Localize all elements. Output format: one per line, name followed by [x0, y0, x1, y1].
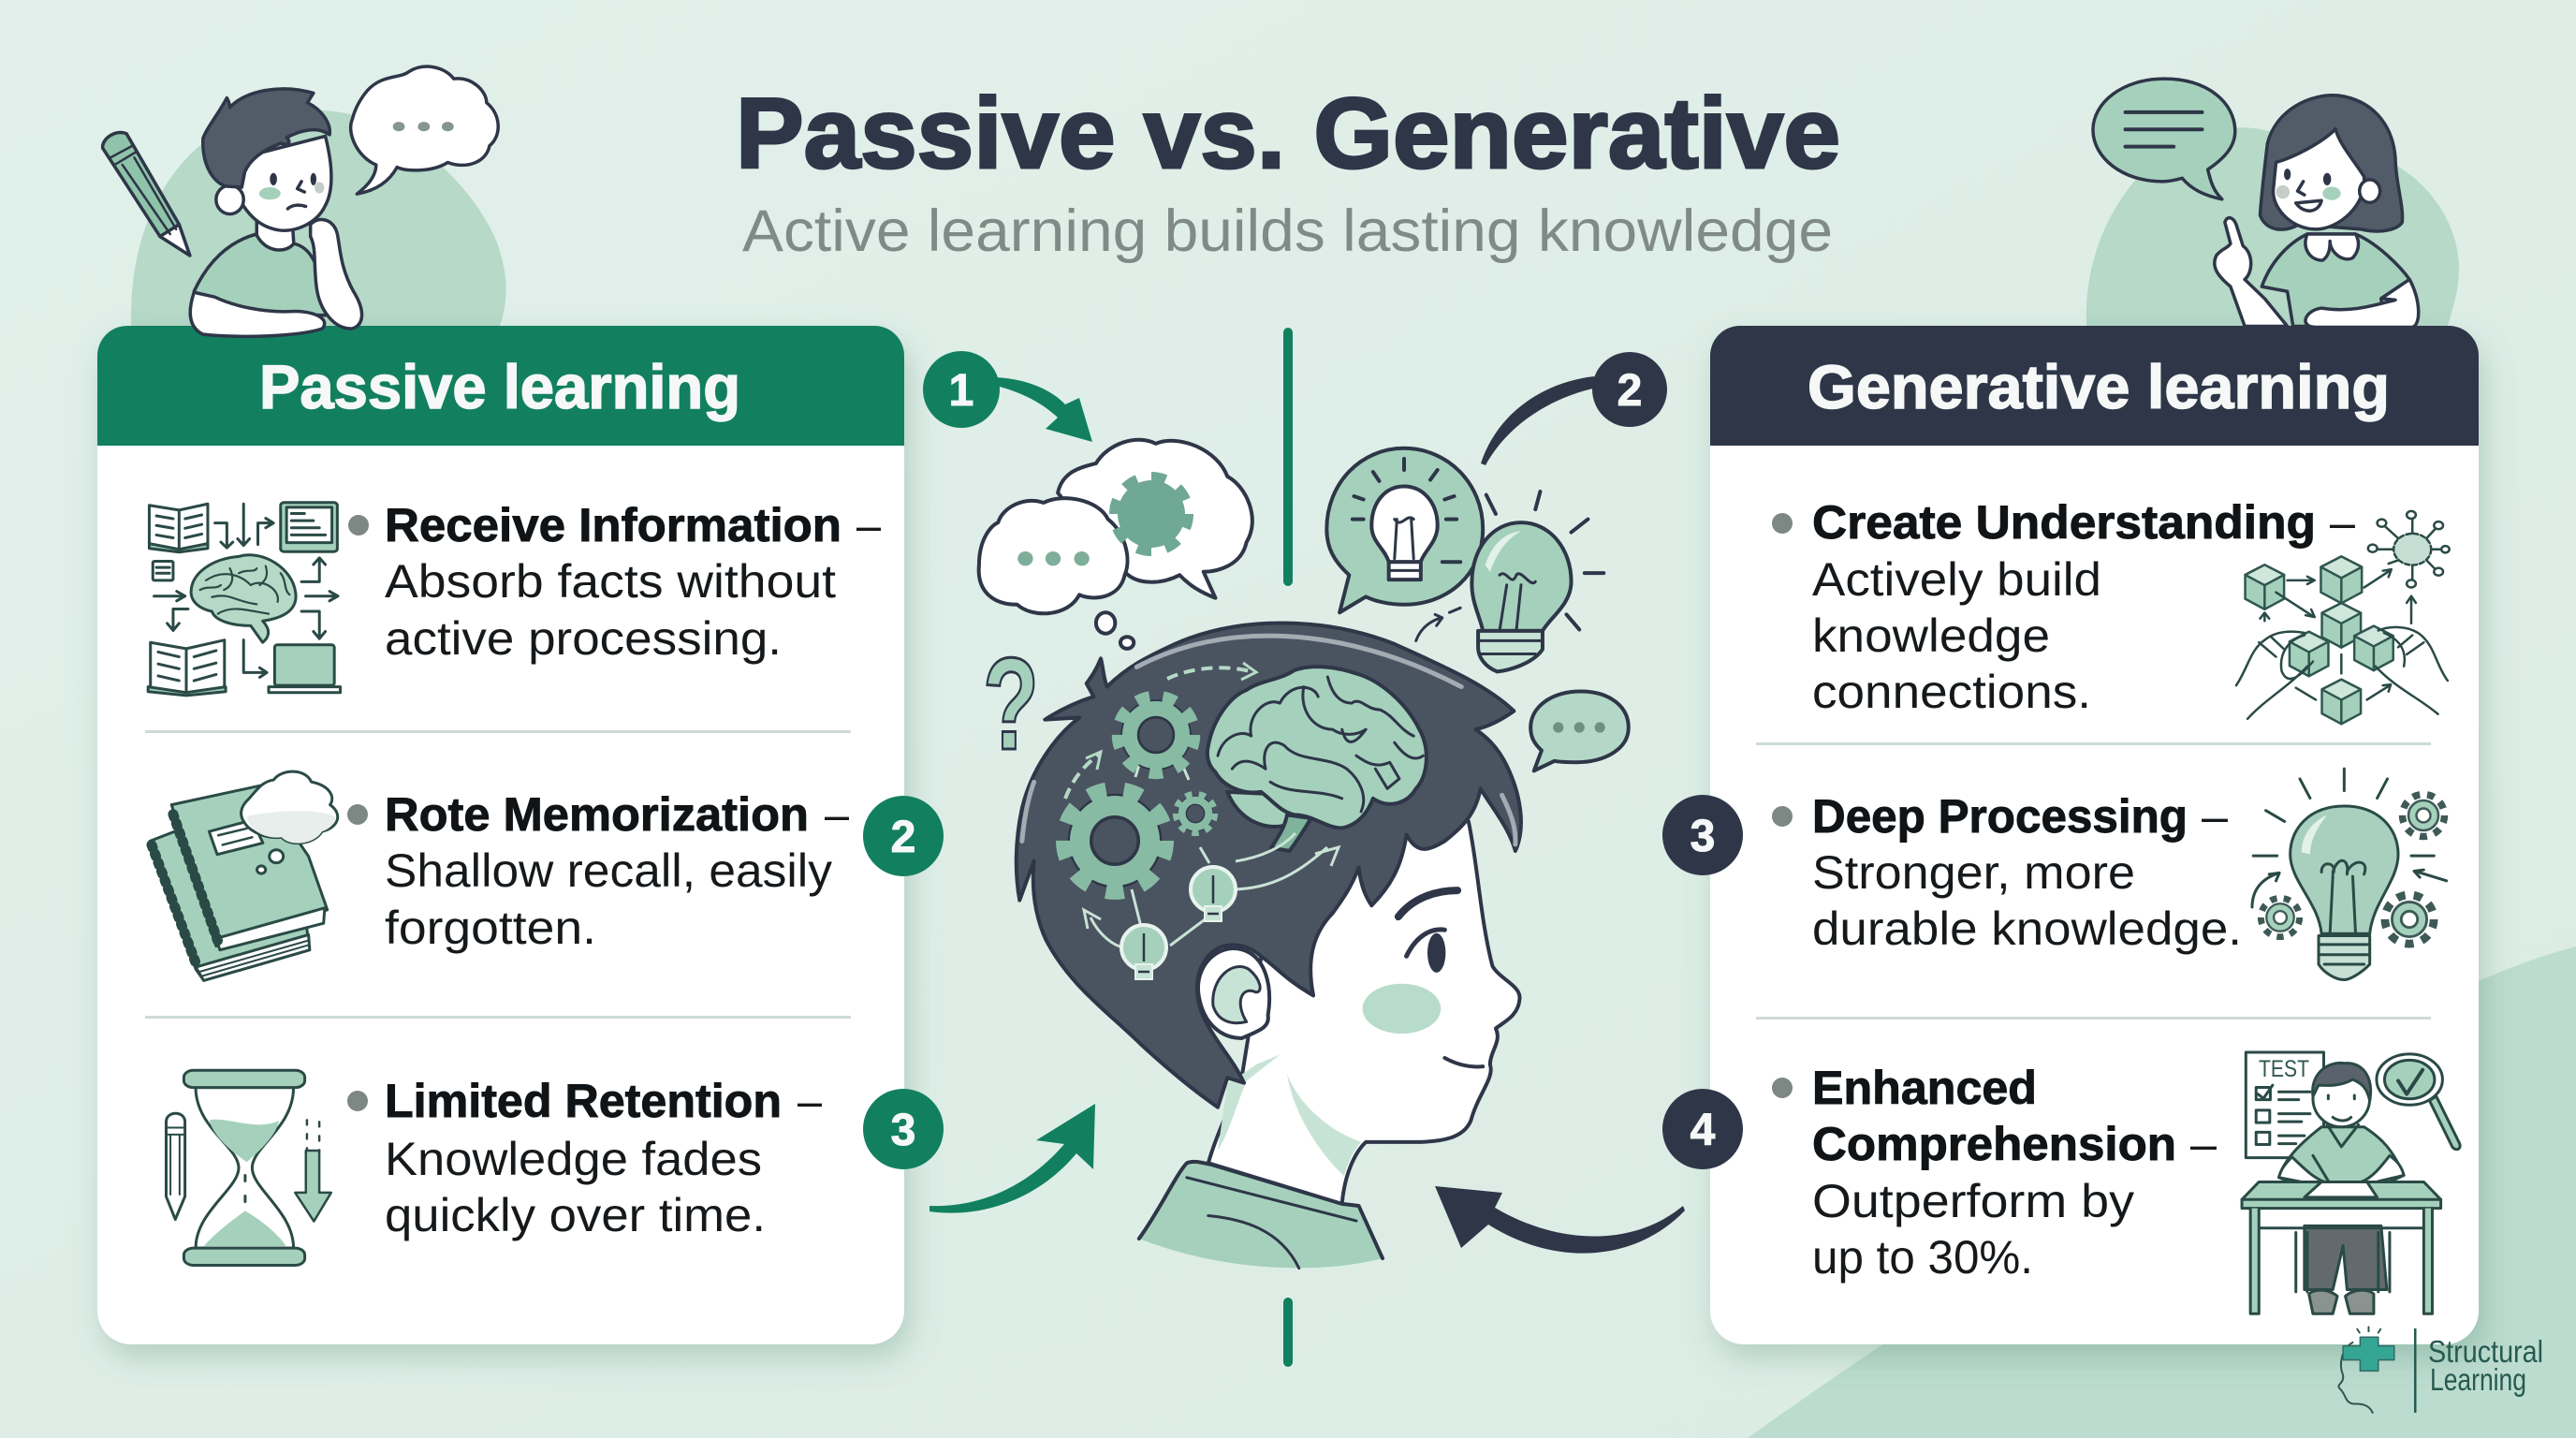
icon: student taking test: [2242, 1052, 2460, 1313]
ear: [1198, 948, 1269, 1038]
item: create understanding: Create Understanding: [1812, 496, 2316, 549]
cloud dots: [1017, 551, 1090, 565]
card body: [1710, 326, 2479, 1344]
cheek: [1363, 984, 1441, 1034]
brain: [1208, 667, 1427, 851]
light bulb: [1416, 492, 1603, 671]
item: deep processing: [1772, 790, 2242, 955]
number badge 3 (generative): [1662, 795, 1743, 875]
divider: [1756, 742, 2431, 745]
header bar: [1710, 326, 2479, 446]
item: limited retention: Limited Retention: [385, 1075, 782, 1127]
thought cloud front: [979, 498, 1127, 613]
item: deep processing: Deep Processing: [1812, 790, 2188, 843]
item: create understanding: –: [2330, 496, 2355, 549]
hair highlight: [1022, 636, 1515, 844]
ideas above head: [979, 440, 1629, 770]
number badge 4: 4: [1690, 1106, 1716, 1155]
number badge 3 (passive): 3: [891, 1106, 915, 1155]
item: limited retention: –: [798, 1075, 822, 1127]
girl: [2215, 95, 2419, 327]
item: create understanding: connections.: [1812, 666, 2091, 718]
number badge 1: 1: [949, 366, 973, 416]
item: create understanding: knowledge: [1812, 609, 2050, 662]
thought cloud: [351, 66, 498, 194]
pencil: [103, 132, 190, 256]
item: deep processing: durable knowledge.: [1812, 902, 2242, 955]
chat bubble: [1530, 691, 1629, 770]
character: thinking boy with pencil and thought cloud: [103, 66, 498, 336]
character: girl pointing with speech bubble: [2093, 79, 2419, 327]
number badge 3 (passive): [863, 1089, 944, 1169]
icon: hourglass with pencil and arrow: [167, 1070, 331, 1265]
mouth: [1444, 1058, 1483, 1066]
character backdrop: left blob: [131, 110, 506, 330]
number badge 3 (generative): 3: [1690, 812, 1715, 861]
logo divider: [2414, 1328, 2417, 1413]
small bulb: [1121, 925, 1166, 979]
item: create understanding: Actively build: [1812, 553, 2101, 606]
icon: stacked notebooks with cloud: [150, 771, 338, 980]
card body: [97, 326, 904, 1344]
icon: brain with books and devices: [148, 503, 341, 696]
boy: [190, 89, 362, 336]
item: rote memorization: forgotten.: [385, 902, 596, 954]
thought bubbles: [1096, 612, 1134, 649]
neck shading: [1218, 1055, 1361, 1176]
logo: Structural Learning: [2338, 1327, 2543, 1413]
character backdrop: right blob: [2086, 127, 2459, 330]
item: enhanced comprehension: –: [2190, 1118, 2217, 1170]
header text: Passive learning: [259, 352, 740, 421]
eye and brow: [1398, 890, 1457, 973]
item: receive information: Absorb facts without: [385, 555, 836, 608]
item: limited retention: [347, 1075, 822, 1241]
brain network: gears on hair: [1064, 663, 1339, 947]
item: rote memorization: –: [825, 788, 849, 841]
shirt collar lines: [1187, 1178, 1356, 1269]
arrow 4: [1435, 1186, 1685, 1254]
arrow from badge 2: [1481, 376, 1597, 465]
logo icon: [2338, 1327, 2394, 1413]
item: rote memorization: [347, 788, 849, 954]
small bulb: [1191, 867, 1236, 921]
icon: building blocks and hands: [2236, 511, 2450, 724]
speech bubble: [2093, 79, 2235, 199]
item: enhanced comprehension: up to 30%.: [1812, 1231, 2033, 1284]
panel: passive learning: [97, 326, 904, 1344]
question mark: ?: [983, 630, 1039, 777]
face and neck: [1208, 769, 1520, 1204]
number badge 2 (generative): [1592, 352, 1667, 427]
item: enhanced comprehension: [1772, 1062, 2217, 1284]
title: Passive vs. Generative: [736, 77, 1840, 189]
item: receive information: active processing.: [385, 612, 782, 665]
item: limited retention: quickly over time.: [385, 1189, 766, 1241]
panel: generative learning: [1710, 326, 2479, 1344]
item: enhanced comprehension: Outperform by: [1812, 1175, 2134, 1227]
header text: Generative learning: [1808, 352, 2390, 421]
TEST label: TEST: [2259, 1056, 2309, 1082]
center divider top: [1283, 328, 1293, 586]
shirt: [1139, 1162, 1383, 1268]
item: create understanding: [1772, 496, 2355, 718]
item: receive information: –: [856, 499, 881, 551]
arrow 3: [929, 1104, 1095, 1213]
gear in thought cloud: [1116, 478, 1187, 550]
divider: [145, 1016, 851, 1019]
item: rote memorization: Rote Memorization: [385, 788, 809, 841]
item: enhanced comprehension: Comprehension: [1812, 1118, 2176, 1170]
divider: [1756, 1017, 2431, 1020]
central illustration: boy head with brain and ideas: [1017, 624, 1521, 1269]
item: enhanced comprehension: Enhanced: [1812, 1062, 2037, 1114]
item: receive information: [348, 499, 881, 665]
center divider bottom: [1283, 1298, 1293, 1367]
arrow 1: [996, 377, 1092, 442]
subtitle: Active learning builds lasting knowledge: [742, 198, 1833, 264]
icon: glowing bulb with gears: [2252, 769, 2447, 979]
thought cloud back: [1058, 440, 1252, 598]
number badge 2 (passive): 2: [891, 813, 915, 862]
number badge 2 (generative): 2: [1617, 366, 1642, 416]
number badge 1: [923, 351, 1000, 428]
item: receive information: Receive Information: [385, 499, 842, 551]
logo: Structural Learning: Learning: [2430, 1362, 2526, 1397]
hair: [1017, 624, 1521, 1108]
item: limited retention: Knowledge fades: [385, 1133, 762, 1185]
item: deep processing: –: [2202, 790, 2228, 843]
item: deep processing: Stronger, more: [1812, 846, 2135, 899]
shirt outline: [1139, 1162, 1383, 1258]
divider: [145, 730, 851, 733]
item: rote memorization: Shallow recall, easily: [385, 844, 832, 897]
logo text: Structural: [2428, 1334, 2543, 1369]
speech bubble with bulb: [1326, 448, 1483, 612]
header bar: [97, 326, 904, 446]
number badge 4: [1662, 1089, 1743, 1169]
number badge 2 (passive): [863, 796, 944, 876]
